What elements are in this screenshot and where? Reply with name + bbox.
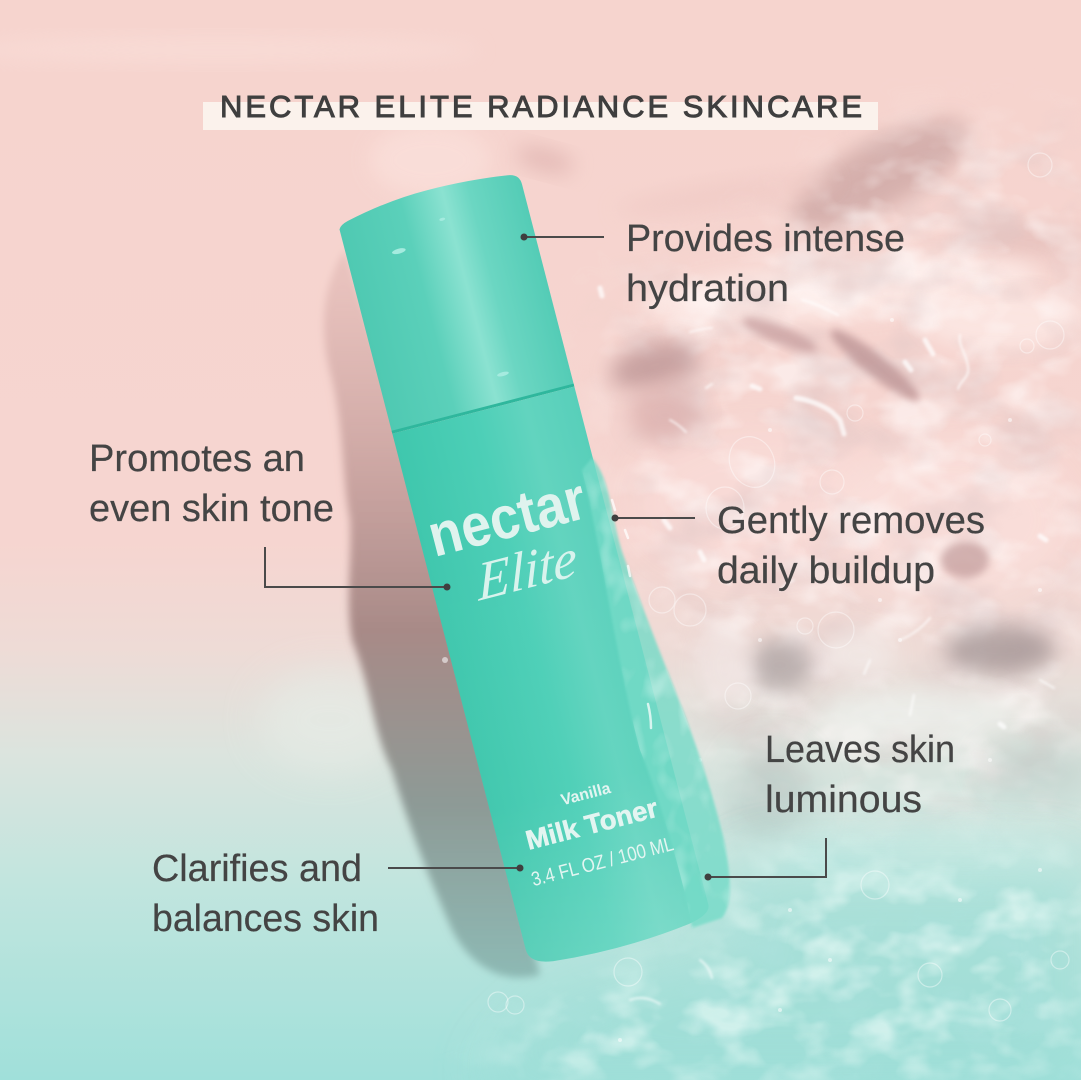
- brand logo: [421, 465, 593, 613]
- callout: gently removes daily buildup: [612, 500, 985, 592]
- callout: promotes an even skin tone: [89, 438, 450, 590]
- title: NECTAR ELITE RADIANCE SKINCARE: [220, 89, 862, 124]
- callout: provides intense hydration: hydration: [626, 268, 789, 310]
- callout: gently removes daily buildup: daily buildup: [717, 550, 935, 592]
- callout: leaves skin luminous: [704, 729, 955, 880]
- callout: leaves skin luminous: Leaves skin: [765, 729, 955, 771]
- callout: clarifies and balances skin: [152, 848, 524, 940]
- bottle cap: [335, 167, 574, 434]
- bottle body: [392, 387, 713, 970]
- title plate: [203, 102, 878, 130]
- water splash, right side: [488, 112, 1081, 1080]
- callout: promotes an even skin tone: even skin tone: [89, 488, 334, 530]
- callout: leaves skin luminous: luminous: [765, 779, 922, 821]
- callout: provides intense hydration: Provides intense: [626, 218, 905, 260]
- product name: Milk Toner: [523, 793, 661, 856]
- product bottle: [335, 167, 750, 970]
- callout: clarifies and balances skin: Clarifies and: [152, 848, 362, 890]
- water film over bottle edge: [582, 458, 731, 928]
- callout: promotes an even skin tone: Promotes an: [89, 438, 305, 480]
- bottle shadow: [324, 250, 540, 978]
- product name: [523, 780, 676, 891]
- callout: clarifies and balances skin: balances skin: [152, 898, 379, 940]
- brand logo: nectar: [421, 465, 593, 570]
- water bubbles and droplets: [442, 153, 1069, 1042]
- product name: Vanilla: [559, 780, 613, 809]
- product name: 3.4 FL OZ / 100 ML: [529, 833, 676, 891]
- callout: gently removes daily buildup: Gently removes: [717, 500, 985, 542]
- brand logo: Elite: [476, 526, 578, 613]
- callout: provides intense hydration: [520, 218, 905, 310]
